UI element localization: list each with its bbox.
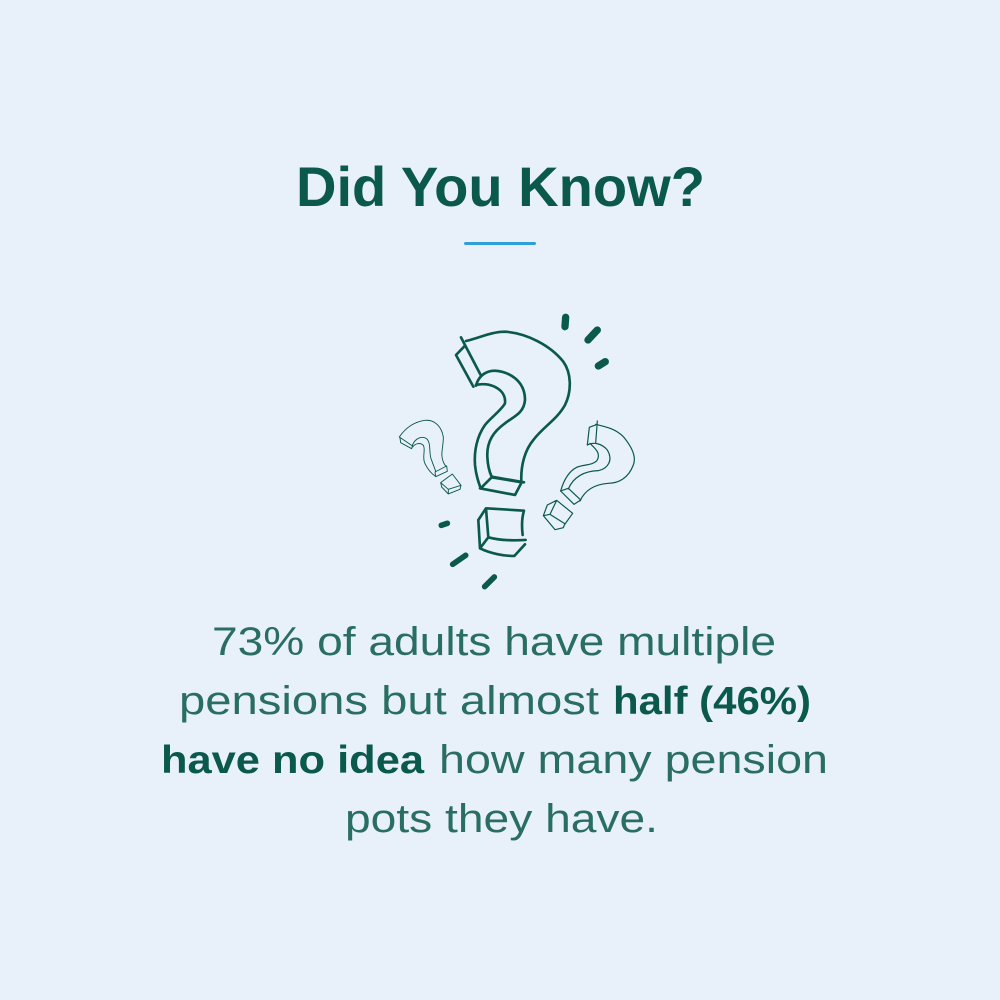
icon: small left question mark xyxy=(399,420,461,494)
icon: large question mark xyxy=(456,332,570,495)
line 3 bold: have no idea xyxy=(161,739,424,782)
icon: emphasis dashes xyxy=(441,317,605,587)
line 3: how many pension xyxy=(439,738,828,782)
illustration: question marks xyxy=(399,317,634,587)
line 4: pots they have. xyxy=(345,797,658,841)
line 2: pensions but almost xyxy=(179,679,599,723)
line 2 bold: half (46%) xyxy=(613,680,811,723)
icon: right question mark xyxy=(543,421,634,530)
title: Did You Know? xyxy=(296,155,705,218)
icon: large question mark dot xyxy=(478,508,526,556)
body text xyxy=(161,620,828,841)
line 1: 73% of adults have multiple xyxy=(212,620,776,664)
title underline xyxy=(464,242,536,245)
